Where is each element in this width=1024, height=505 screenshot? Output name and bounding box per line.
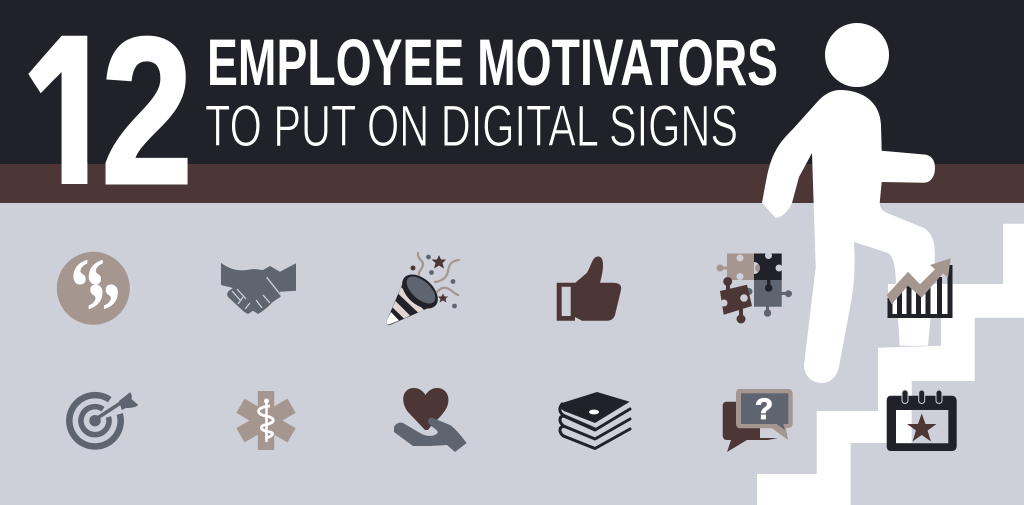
icon: quotation marks: “	[70, 241, 105, 332]
icon: quotation marks	[57, 241, 130, 357]
icon: speech bubbles with question mark	[723, 389, 793, 452]
icon: quotation marks: ”	[86, 266, 121, 357]
icon: handshake	[221, 263, 296, 314]
large number 12: 1	[24, 0, 100, 229]
walking person figure	[762, 23, 935, 383]
title line 1: EMPLOYEE MOTIVATORS	[207, 25, 778, 99]
icon: stack of books	[560, 392, 630, 448]
icon: jigsaw puzzle pieces	[716, 252, 792, 324]
icon: star of life medical symbol	[236, 391, 296, 450]
large number 12	[28, 36, 188, 184]
icon: heart in hand	[394, 388, 467, 452]
icon: rising chart arrow	[887, 258, 952, 318]
icon: speech bubbles with question mark: ?	[755, 393, 773, 426]
icon: target with dart	[69, 392, 138, 446]
icon: party popper	[387, 253, 459, 325]
title line 2: TO PUT ON DIGITAL SIGNS	[205, 94, 738, 159]
icon: thumbs up	[557, 256, 621, 321]
header band	[0, 0, 1024, 203]
staircase	[757, 224, 1024, 505]
large number 12: 2	[101, 0, 193, 228]
icon: calendar with star	[887, 390, 957, 451]
